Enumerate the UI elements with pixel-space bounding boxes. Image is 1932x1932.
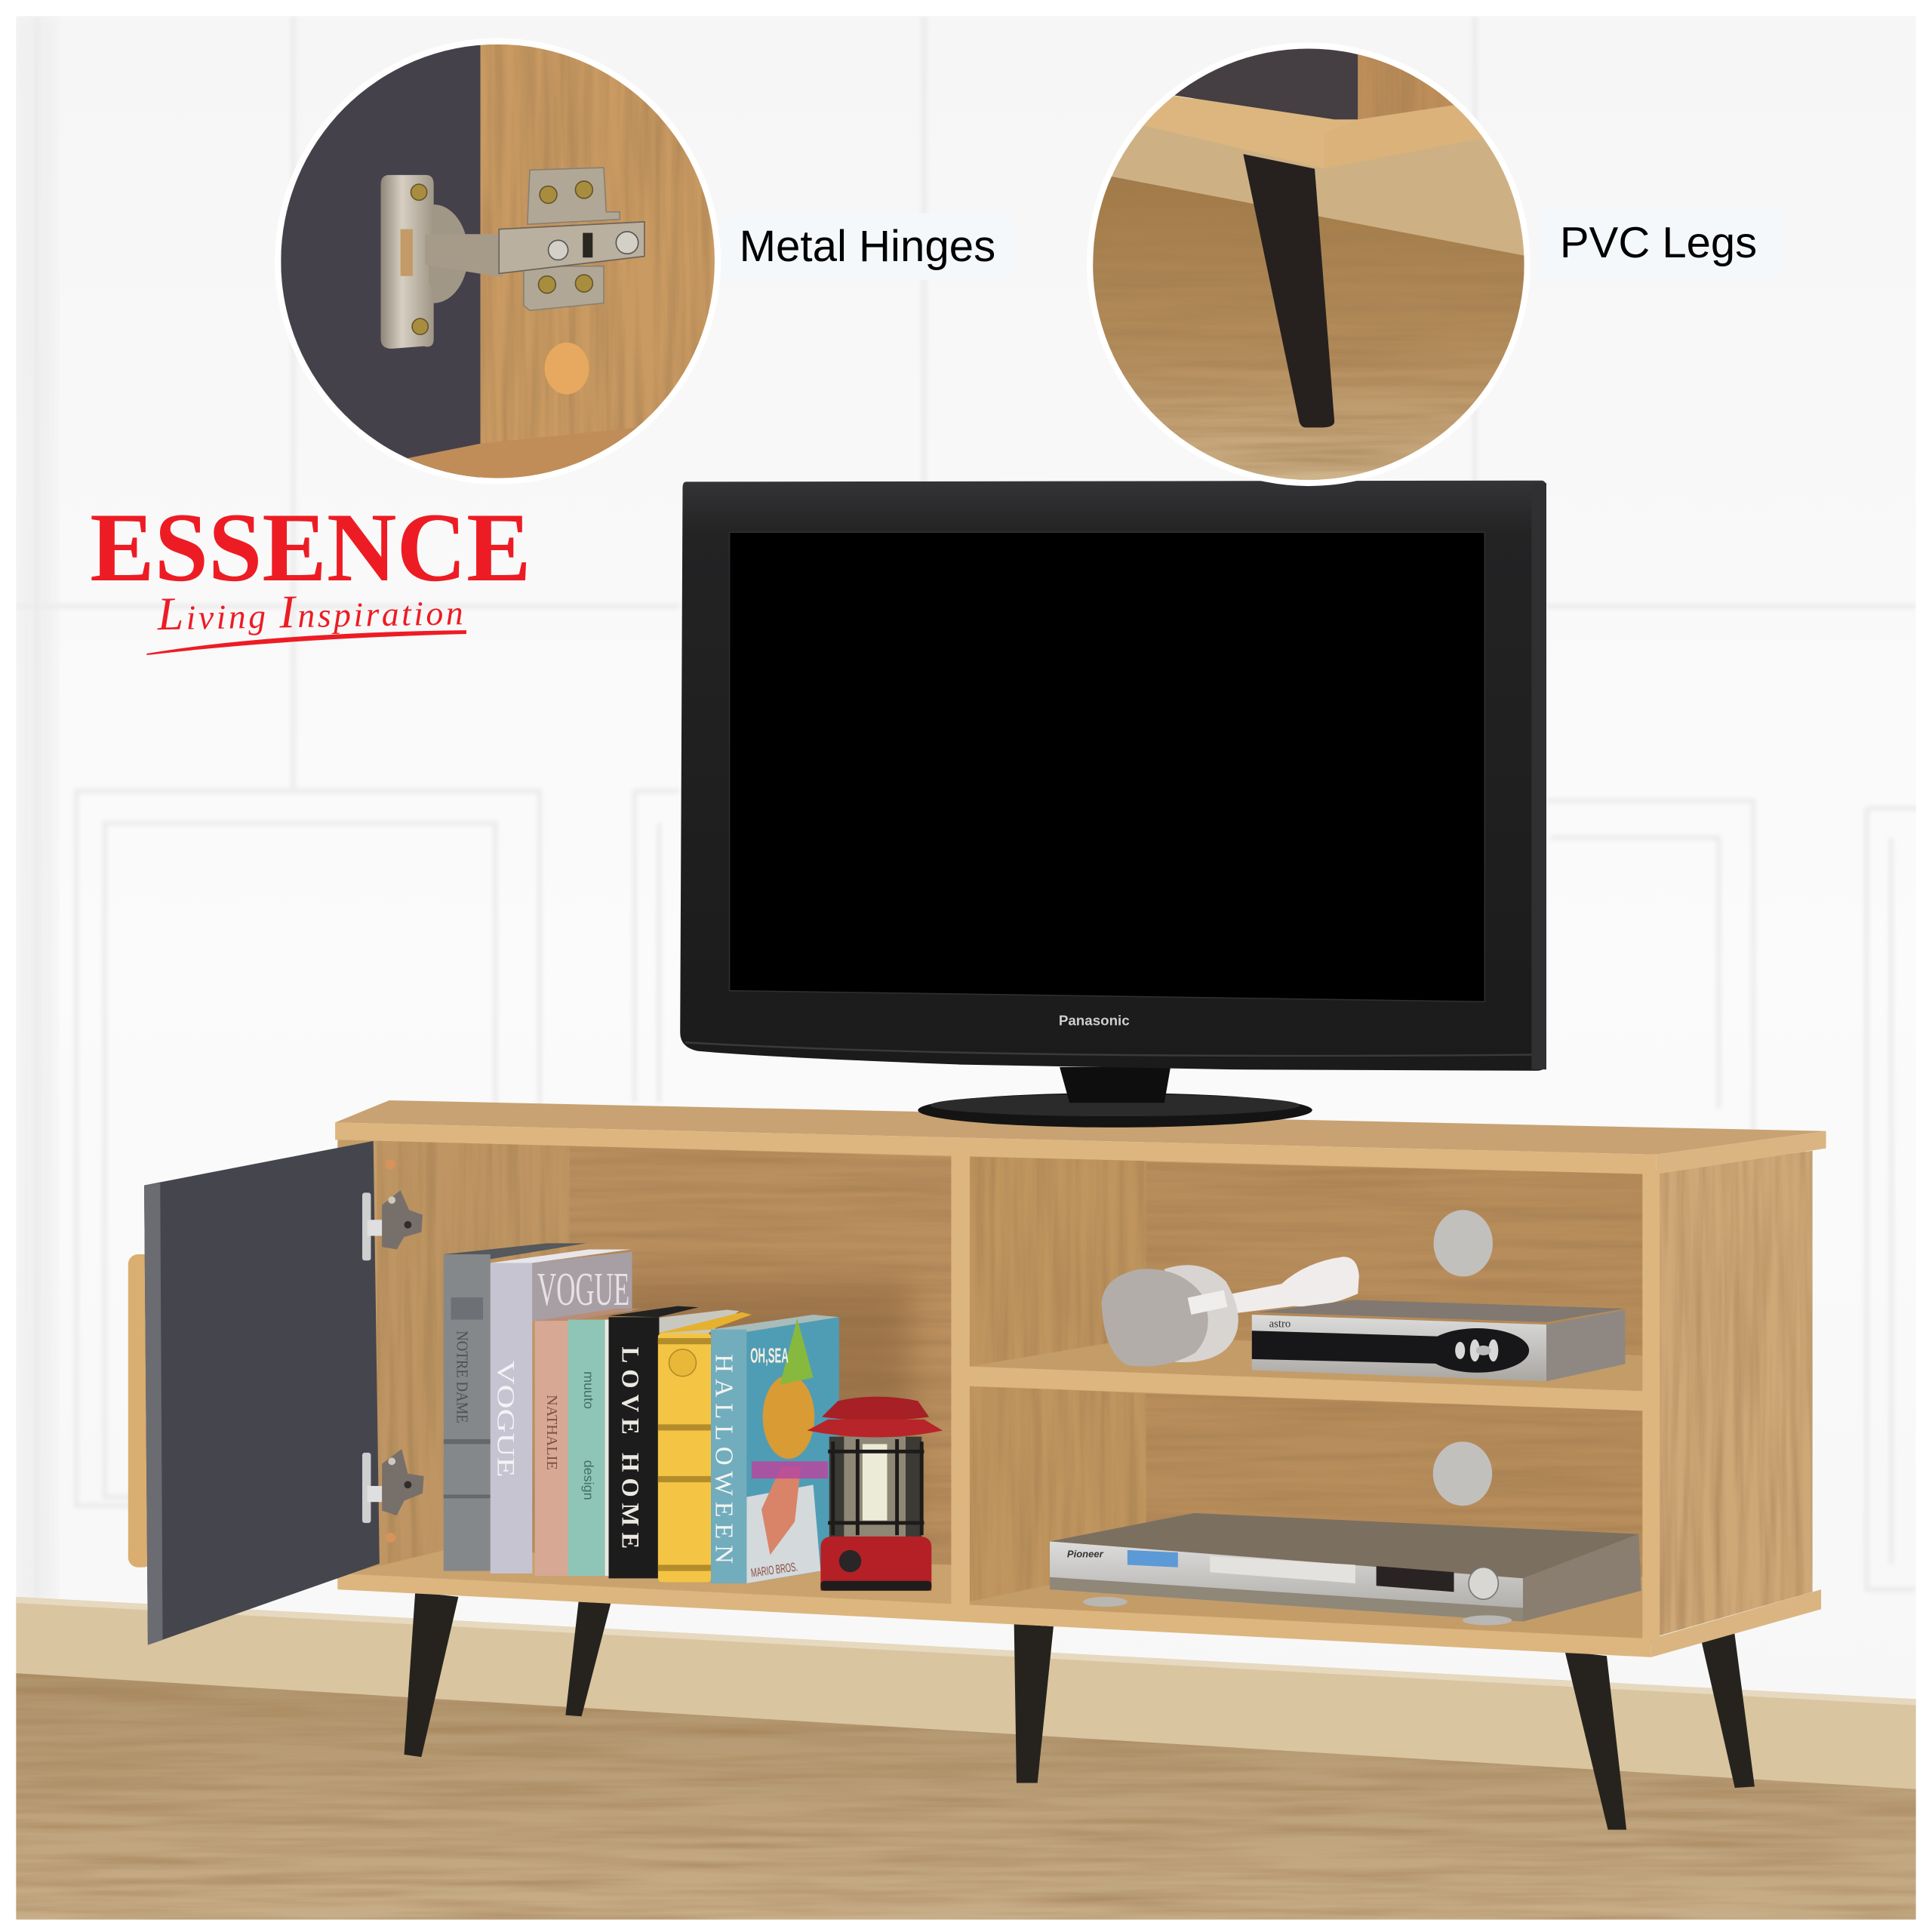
- satellite receiver box: [1252, 1300, 1625, 1381]
- upper right side panel: [968, 1157, 1146, 1367]
- dark door section: [281, 45, 481, 478]
- cable hole lower: [1433, 1441, 1492, 1506]
- wood side: [1358, 48, 1527, 119]
- dark door corner: [1171, 37, 1358, 119]
- upper right back panel: [1146, 1162, 1644, 1367]
- slot: [583, 233, 592, 257]
- door hinge top: [362, 1190, 423, 1260]
- brand name: ESSENCE: [90, 494, 531, 602]
- book: Halloween: HALLOWEEN: [710, 1354, 739, 1564]
- book: Halloween: [710, 1315, 839, 1583]
- book: Vogue: [491, 1250, 632, 1574]
- red lantern: [807, 1397, 943, 1591]
- book: Halloween: MARIO BROS.: [750, 1560, 798, 1580]
- shadow behind books: [616, 1281, 912, 1527]
- TV stand: [918, 1067, 1312, 1128]
- bottom board: [1651, 1589, 1821, 1657]
- logo: ESSENCE: [90, 494, 531, 654]
- book: Love Home: LOVE HOME: [616, 1346, 643, 1549]
- book: muuto design: [568, 1320, 610, 1576]
- upper shelf top: [968, 1337, 1644, 1392]
- TV lower bezel highlight: [685, 1042, 1531, 1056]
- label: Metal Hinges: Metal Hinges: [740, 222, 995, 271]
- floor: [1084, 174, 1527, 483]
- baseboard: [16, 1597, 1916, 1789]
- satellite receiver box: astro: [1269, 1318, 1291, 1330]
- book: Vogue: VOGUE: [492, 1360, 519, 1478]
- TV screen: [730, 532, 1484, 1001]
- board right face: [1324, 105, 1527, 169]
- book: Vogue: VOGUE: [537, 1264, 629, 1315]
- lower right side panel: [968, 1385, 1146, 1601]
- left compartment back panel: [569, 1146, 954, 1601]
- lower shelf floor: [968, 1564, 1644, 1641]
- TV brand: Panasonic: [1059, 1012, 1130, 1028]
- cabinet legs: [405, 1592, 1755, 1829]
- TV cabinet: [128, 1100, 1826, 1829]
- cable hole upper: [1434, 1210, 1493, 1276]
- left compartment floor: [337, 1550, 954, 1607]
- board left face: [1109, 94, 1358, 169]
- hinge arms: [425, 234, 503, 277]
- label: PVC Legs: PVC Legs: [1560, 219, 1757, 267]
- book: Love Home: [609, 1306, 740, 1578]
- right side panel: [1657, 1151, 1813, 1636]
- book: Notre Dame: NOTRE DAME: [454, 1331, 472, 1423]
- upper shelf front: [968, 1367, 1644, 1411]
- DVD player: Pioneer: [1067, 1549, 1104, 1560]
- lower right back panel: [1146, 1394, 1644, 1589]
- book: muuto design: design: [581, 1460, 596, 1500]
- door hinge bottom: [362, 1449, 424, 1523]
- cup: [429, 205, 466, 303]
- mount plate bottom: [524, 266, 604, 310]
- open door: [144, 1141, 380, 1645]
- centre divider: [951, 1155, 970, 1607]
- TV bezel: [680, 481, 1546, 1071]
- screws: [411, 181, 592, 334]
- top board surface: [335, 1100, 1826, 1155]
- label: Metal Hinges: [721, 213, 1013, 280]
- label: PVC Legs: [1540, 210, 1783, 277]
- cover caps on side panel: [386, 1159, 395, 1543]
- tagline underline: [146, 631, 466, 654]
- tagline: Living Inspiration: [156, 583, 463, 640]
- baseboard behind leg: [1084, 48, 1527, 282]
- book: Nathalie: NATHALIE: [543, 1395, 559, 1470]
- book: Halloween: OH,SEA: [750, 1344, 789, 1367]
- door handle: [128, 1254, 152, 1567]
- top board front edge: [1656, 1131, 1826, 1174]
- row of books: [444, 1243, 839, 1583]
- book: Notre Dame: [444, 1243, 586, 1571]
- TV right edge: [1531, 483, 1546, 1069]
- book: Nathalie: [535, 1309, 641, 1576]
- DVD player: [1050, 1513, 1641, 1625]
- television: [680, 481, 1546, 1128]
- wood section: [481, 45, 715, 478]
- legs detail circle: [1084, 37, 1531, 486]
- hinge detail circle: [275, 38, 721, 485]
- left compartment side panel: [377, 1140, 569, 1566]
- headphones: [1102, 1257, 1359, 1366]
- book: yellow classic: [658, 1312, 752, 1582]
- front post: [1642, 1171, 1660, 1641]
- book: muuto design: muuto: [581, 1371, 596, 1409]
- white behind top: [1084, 37, 1220, 99]
- cabinet carcass base: [337, 1134, 1659, 1645]
- black tapered leg: [1243, 154, 1334, 428]
- door plate: [380, 175, 434, 349]
- plastic cap: [545, 343, 589, 394]
- wooden floor: [16, 1673, 1916, 1920]
- mount plate top: [528, 168, 620, 224]
